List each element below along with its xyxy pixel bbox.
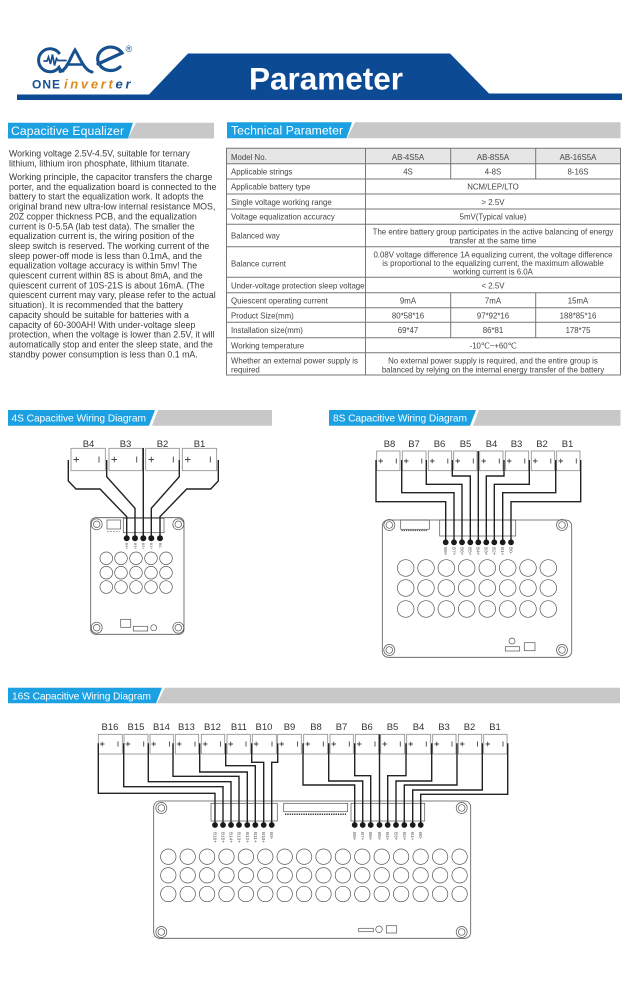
table values: is proportional to the equalizing current, the maximum allowable bbox=[382, 259, 604, 268]
terminal labels 8S: B8+ bbox=[443, 547, 448, 556]
capacitors 16S bbox=[161, 849, 467, 902]
table grid bbox=[226, 148, 620, 375]
heading: capacitive equalizer bbox=[8, 123, 214, 138]
table values: 4-8S bbox=[485, 168, 501, 177]
batteries 16S: B10 bbox=[256, 722, 272, 733]
batteries 16S: B15 bbox=[128, 722, 144, 733]
row labels: Installation size(mm) bbox=[231, 326, 303, 335]
table values: 80*58*16 bbox=[392, 311, 425, 320]
row labels: Whether an external power supply is bbox=[231, 356, 358, 365]
terminal labels 8S: B2+ bbox=[492, 547, 497, 556]
row labels: Voltage equalization accuracy bbox=[231, 213, 335, 222]
batteries 16S: B9 bbox=[284, 722, 295, 733]
table values: AB-8S5A bbox=[477, 153, 510, 162]
table values: > 2.5V bbox=[482, 198, 505, 207]
text block: description: sleep power-off mode is less than 0.1mA, and the bbox=[9, 251, 202, 261]
terminal labels 4S: B2+ bbox=[141, 543, 145, 549]
table values: -10℃~+60℃ bbox=[470, 341, 517, 350]
terminal labels 4S: B3+ bbox=[133, 543, 137, 549]
table values: 0.08V voltage difference 1A equalizing current, the voltage difference bbox=[373, 250, 613, 259]
terminal labels 4S: B1+ bbox=[149, 543, 153, 549]
terminal labels 16S: B16+ bbox=[212, 832, 218, 843]
batteries 8S: B1 bbox=[562, 439, 573, 450]
terminal labels 16S: B0- bbox=[418, 832, 423, 840]
table values: 8-16S bbox=[568, 168, 588, 177]
terminal labels 8S: B4+ bbox=[476, 547, 481, 556]
text block: description: Working voltage 2.5V-4.5V, suitable for ternary bbox=[9, 149, 191, 159]
terminal labels 16S: B11+ bbox=[253, 832, 258, 843]
table values: AB-16S5A bbox=[560, 153, 597, 162]
terminal labels 16S: B13+ bbox=[236, 832, 242, 843]
batteries 16S: B11 bbox=[231, 722, 247, 733]
row labels: Applicable battery type bbox=[231, 183, 311, 192]
batteries 8S: B6 bbox=[434, 439, 445, 450]
text block: description: 20Z copper thickness PCB, and the equalization bbox=[9, 211, 197, 221]
logo: inverter bbox=[64, 76, 131, 91]
table header row fill bbox=[226, 148, 620, 164]
batteries 16S: B14 bbox=[153, 722, 170, 733]
table values: 5mV(Typical value) bbox=[460, 213, 527, 222]
table values: 69*47 bbox=[398, 326, 418, 335]
terminals 8S bbox=[443, 539, 514, 545]
row labels: Single voltage working range bbox=[231, 198, 332, 207]
terminal labels 8S: B5+ bbox=[468, 547, 473, 556]
row labels: Model No. bbox=[231, 153, 267, 162]
batteries 16S: B3 bbox=[438, 722, 450, 733]
text block: description: quiescent current within 8S is about 8mA, and the bbox=[9, 270, 203, 280]
wires 8S bbox=[376, 451, 581, 542]
table: technical parameters bbox=[226, 148, 620, 375]
text block: description: situation). It is recommended that the battery bbox=[9, 300, 184, 310]
row labels: Applicable strings bbox=[231, 168, 293, 177]
terminals 16S bbox=[212, 822, 424, 828]
heading: 4S wiring diagram bbox=[8, 410, 272, 426]
terminal labels 4S bbox=[124, 543, 162, 549]
text block: description bbox=[9, 149, 216, 359]
board 8S bbox=[382, 520, 572, 657]
batteries 8S bbox=[377, 439, 580, 471]
batteries 4S: B1 bbox=[194, 439, 205, 450]
row labels: required bbox=[231, 365, 260, 374]
batteries 16S: B5 bbox=[387, 722, 398, 733]
batteries 8S: B3 bbox=[511, 439, 522, 450]
logo mark bbox=[39, 47, 122, 72]
text block: description: original brand new ultra-low internal resistance MOS, bbox=[9, 202, 215, 212]
table values bbox=[373, 153, 613, 374]
text block: description: quiescent current of 10S-21S is about 16mA. (The bbox=[9, 280, 205, 290]
batteries 16S: B8 bbox=[310, 722, 322, 733]
terminal labels 16S: B9- bbox=[269, 832, 274, 840]
table values: transfer at the same time bbox=[450, 237, 537, 246]
text block: description: protection, when the voltage is lower than 2.5V, it will bbox=[9, 330, 215, 340]
text block: description: quiescent current may vary, please refer to the actual bbox=[9, 290, 216, 300]
terminal labels 16S: B10+ bbox=[261, 832, 266, 843]
batteries 16S bbox=[98, 722, 507, 754]
terminal labels 8S bbox=[443, 547, 513, 556]
text block: description: standby power consumption is less than 0.1 mA. bbox=[9, 349, 198, 359]
text block: description: Working principle, the capacitor transfers the charge bbox=[9, 172, 212, 182]
batteries 16S: B16 bbox=[102, 722, 118, 733]
table values: < 2.5V bbox=[482, 282, 505, 291]
capacitors 8S bbox=[397, 560, 557, 617]
heading: 8S wiring diagram: 8S Capacitive Wiring Diagram bbox=[333, 414, 467, 425]
wires 4S bbox=[68, 448, 218, 538]
batteries 4S bbox=[71, 439, 217, 471]
text block: description: sleep switch is reserved. The working current of the bbox=[9, 241, 209, 251]
table values: 15mA bbox=[568, 297, 589, 306]
text block: description: automatically stop and enter the sleep state, and the bbox=[9, 340, 213, 350]
batteries 16S: B7 bbox=[336, 722, 347, 733]
batteries 8S: B2 bbox=[536, 439, 548, 450]
heading: technical parameter bbox=[227, 122, 620, 138]
terminal labels 4S: B0- bbox=[158, 543, 162, 549]
terminal labels 16S: B7+ bbox=[360, 832, 365, 841]
text block: description: current is 0-5.5A (lab test data). The smaller the bbox=[9, 221, 195, 231]
heading: 16S wiring diagram: 16S Capacitive Wiring Diagram bbox=[12, 691, 151, 702]
table values: balanced by relying on the internal energy transfer of the battery bbox=[382, 365, 604, 374]
text block: description: capacity should be suitable for batteries with a bbox=[9, 310, 189, 320]
text block: description: battery to start the equalization work. It adopts the bbox=[9, 192, 204, 202]
batteries 16S: B2 bbox=[464, 722, 475, 733]
batteries 8S: B5 bbox=[460, 439, 471, 450]
row labels: Working temperature bbox=[231, 341, 305, 350]
heading: 8S wiring diagram bbox=[329, 410, 620, 426]
diagram: 8S wiring bbox=[376, 439, 581, 657]
batteries 16S: B13 bbox=[178, 722, 195, 733]
terminal labels 16S bbox=[212, 832, 423, 843]
table values: working current is 6.0A bbox=[452, 268, 534, 277]
table values: AB-4S5A bbox=[392, 153, 425, 162]
batteries 4S: B2 bbox=[157, 439, 168, 450]
table values: 9mA bbox=[400, 297, 417, 306]
row labels: Balanced way bbox=[231, 231, 280, 240]
batteries 16S: B12 bbox=[204, 722, 221, 733]
row labels: Balance current bbox=[231, 259, 287, 268]
terminal labels 16S: B3+ bbox=[394, 832, 398, 841]
board 4S bbox=[91, 518, 184, 634]
table values: The entire battery group participates in the active balancing of energy bbox=[373, 228, 613, 237]
text block: description: capacity of 60-300AH! With under-voltage sleep bbox=[9, 320, 195, 330]
text block: description: equalization voltage accuracy is within 5mv! The bbox=[9, 261, 197, 271]
terminal labels 16S: B4+ bbox=[385, 832, 390, 841]
terminal labels 16S: B8+ bbox=[352, 832, 357, 841]
row labels: Under-voltage protection sleep voltage bbox=[231, 282, 365, 291]
batteries 16S: B6 bbox=[361, 722, 373, 733]
table values: 178*75 bbox=[566, 326, 591, 335]
batteries 8S: B8 bbox=[384, 439, 395, 450]
capacitors 4S bbox=[100, 552, 172, 593]
table values: 97*92*16 bbox=[477, 311, 510, 320]
heading: 4S wiring diagram: 4S Capacitive Wiring Diagram bbox=[12, 414, 146, 425]
terminal labels 16S: B12+ bbox=[245, 832, 250, 843]
terminal labels 16S: B1+ bbox=[410, 832, 415, 841]
terminal labels 16S: B5+ bbox=[377, 832, 382, 841]
terminals 4S bbox=[124, 535, 163, 541]
row labels: Product Size(mm) bbox=[231, 311, 294, 320]
heading: technical parameter: Technical Parameter bbox=[231, 124, 343, 138]
batteries 8S: B7 bbox=[408, 439, 420, 450]
terminal labels 8S: B7+ bbox=[451, 547, 456, 556]
text block: description: equalization current is, the wiring position of the bbox=[9, 231, 194, 241]
batteries 4S: B4 bbox=[83, 439, 94, 450]
wires 16S bbox=[98, 734, 508, 825]
batteries 16S: B4 bbox=[413, 722, 424, 733]
heading: 16S wiring diagram bbox=[8, 688, 620, 703]
table values: NCM/LEP/LTO bbox=[467, 183, 519, 192]
header banner bbox=[17, 54, 622, 100]
logo wordmark: ONE bbox=[32, 77, 60, 91]
registered mark: ® bbox=[126, 44, 133, 54]
terminal labels 8S: B1+ bbox=[500, 547, 505, 556]
table values: No external power supply is required, and the entire group is bbox=[388, 356, 598, 365]
terminal labels 8S: B0- bbox=[508, 547, 513, 555]
heading: capacitive equalizer: Capacitive Equalizer bbox=[11, 124, 124, 138]
table values: 86*81 bbox=[483, 326, 503, 335]
text block: description: porter, and the equalization board is connected to the bbox=[9, 182, 216, 192]
terminal labels 16S: B2+ bbox=[402, 832, 407, 841]
terminal labels 4S: B4+ bbox=[124, 543, 128, 549]
row labels bbox=[231, 153, 365, 374]
batteries 8S: B4 bbox=[486, 439, 497, 450]
terminal labels 8S: B6+ bbox=[459, 547, 464, 556]
row labels: Quiescent operating current bbox=[231, 297, 329, 306]
terminal labels 16S: B14+ bbox=[228, 832, 234, 843]
title: Parameter bbox=[249, 60, 403, 96]
terminal labels 8S: B3+ bbox=[484, 547, 489, 556]
table values: 4S bbox=[403, 168, 413, 177]
terminal labels 16S: B15+ bbox=[220, 832, 226, 843]
table values: 188*85*16 bbox=[560, 311, 597, 320]
table values: 7mA bbox=[485, 297, 502, 306]
batteries 16S: B1 bbox=[489, 722, 501, 733]
terminal labels 16S: B6+ bbox=[368, 832, 373, 841]
board 16S bbox=[154, 801, 471, 938]
diagram: 16S wiring bbox=[98, 722, 508, 938]
diagram: 4S wiring bbox=[68, 439, 218, 634]
text block: description: lithium, lithium iron phosphate, lithium titanate. bbox=[9, 159, 189, 169]
batteries 4S: B3 bbox=[120, 439, 131, 450]
logo bbox=[32, 44, 133, 91]
